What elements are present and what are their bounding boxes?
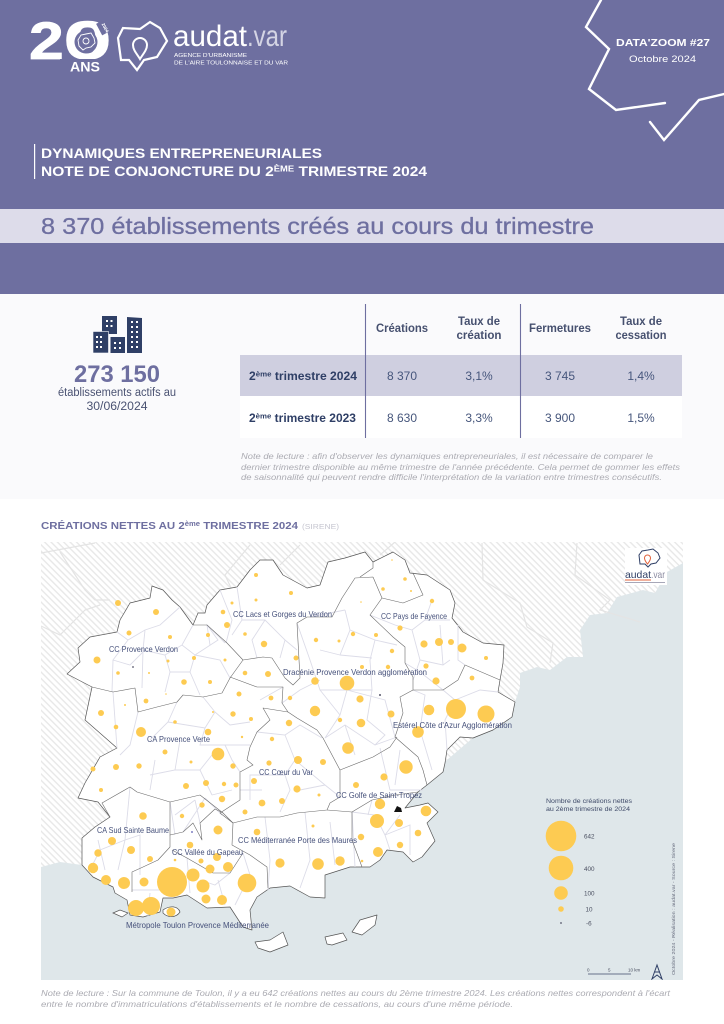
table row: 2024: 2	[249, 371, 255, 383]
table header: Créations	[376, 323, 428, 335]
decorative outline: territory shape with edition label: Octobre 2024	[629, 54, 696, 65]
map credit: Octobre 2024 - Réalisation : audat.var - Source : Sirene	[671, 843, 677, 975]
circles: net creations per commune	[88, 559, 495, 916]
reading note: map	[41, 988, 671, 1009]
scale bar: 5	[608, 968, 611, 972]
table row: 2023: 1,5%	[627, 411, 655, 425]
stat: active establishments: établissements actifs au	[58, 387, 176, 399]
legend: au 2ème trimestre de 2024	[546, 806, 631, 813]
table row: 2024: 8 370	[387, 369, 417, 383]
territory labels: CC Vallée du Gapeau	[172, 847, 243, 857]
scale bar: 0	[587, 968, 590, 972]
table row: 2024: ème	[256, 370, 272, 378]
reading note: table: de saisonnalité qui peuvent rendre difficile l'interprétation de la variation entre trimestres consécutifs.	[241, 472, 662, 482]
map logo	[625, 548, 667, 585]
panel: key figures	[0, 294, 724, 499]
map logo: .var	[651, 569, 665, 581]
table row: 2024: trimestre 2024	[272, 371, 358, 383]
headline band: 8 370 établissements créés au cours du trimestre	[41, 213, 594, 239]
territory labels	[97, 609, 512, 930]
stat: active establishments: 273 150	[74, 361, 160, 388]
table header: Taux de	[458, 316, 500, 328]
table header: Taux de	[620, 316, 662, 328]
table row: 2023: 8 630	[387, 411, 417, 425]
title: ÈME	[274, 164, 295, 174]
table row: 2023: 3 900	[545, 411, 575, 425]
Var department land	[67, 552, 515, 930]
legend: 10	[586, 906, 593, 914]
reading note: table	[241, 451, 680, 482]
table header	[376, 316, 666, 342]
neighbouring land (hatched)	[41, 542, 683, 867]
territory labels: Dracénie Provence Verdon agglomération	[283, 667, 427, 677]
territory labels: CC Cœur du Var	[259, 767, 313, 777]
map heading: (SIRENE)	[302, 522, 340, 531]
reading note: map: entre le nombre d'immatriculations d'établissements et le nombre de cessations, au cours d'une même période.	[41, 999, 513, 1009]
map	[41, 542, 683, 980]
headline band	[0, 209, 724, 243]
icon: buildings	[93, 316, 142, 353]
commune boundaries	[90, 587, 498, 916]
title: NOTE DE CONJONCTURE DU 2	[41, 163, 251, 179]
table row: 2023	[249, 411, 655, 425]
map heading: ème	[185, 521, 200, 528]
reading note: table: dernier trimestre disponible au même trimestre de l'année précédente. Cela permet de gommer les effets	[241, 462, 680, 472]
territory labels: Estérel Côte d'Azur Agglomération	[393, 720, 512, 730]
table row: 2024: 3,1%	[465, 369, 493, 383]
title	[34, 144, 427, 179]
territory labels: CC Golfe de Saint-Tropez	[336, 790, 422, 800]
logo: 20 ans: 0	[64, 11, 112, 71]
title: DYNAMIQUES ENTREPRENEURIALES	[41, 145, 322, 161]
table header: création	[456, 330, 502, 342]
table	[240, 304, 682, 438]
territory labels: CC Lacs et Gorges du Verdon	[233, 609, 332, 619]
stat: active establishments	[58, 361, 176, 413]
logo: audat.var: DE L'AIRE TOULONNAISE ET DU VAR	[174, 60, 288, 66]
logo: audat.var: .var	[247, 20, 287, 53]
legend: 100	[584, 890, 595, 898]
map heading: CRÉATIONS NETTES AU 2	[41, 520, 173, 532]
logo: audat.var	[118, 20, 288, 70]
table row: 2023: trimestre 2023	[271, 413, 356, 425]
logo: audat.var: AGENCE D'URBANISME	[174, 53, 247, 59]
EPCI boundaries	[92, 562, 500, 892]
territory labels: CC Méditerranée Porte des Maures	[238, 835, 357, 845]
reading note: table: Note de lecture : afin d'observer les dynamiques entrepreneuriales, il est nécessaire de comparer le	[241, 451, 653, 461]
table header: Fermetures	[529, 323, 591, 335]
logo: 20 ans: 2	[29, 12, 64, 71]
decorative outline: territory shape with edition label: DATA'ZOOM #27	[616, 37, 710, 49]
title: TRIMESTRE 2024	[294, 163, 427, 179]
map heading	[41, 519, 340, 532]
header panel	[0, 0, 724, 294]
stat: active establishments: 30/06/2024	[86, 401, 148, 413]
islands	[255, 915, 377, 952]
scale bar: 10 km	[628, 968, 641, 972]
reading note: map: Note de lecture : Sur la commune de Toulon, il y a eu 642 créations nettes au cours du 2ème trimestre 2024. Les créations nettes correspondent à l'écart	[41, 988, 671, 998]
table row: 2024	[249, 369, 655, 383]
territory labels: Métropole Toulon Provence Méditerranée	[126, 920, 269, 930]
legend: Nombre de créations nettes	[546, 798, 632, 805]
table header: cessation	[616, 330, 666, 342]
map logo: audat	[625, 569, 651, 581]
scale bar	[587, 968, 641, 974]
table row: 2023: 2	[249, 413, 255, 425]
legend: 642	[584, 834, 595, 840]
table row: 2024: 1,4%	[627, 369, 655, 383]
legend: 400	[584, 866, 595, 873]
table row: 2023: ème	[256, 412, 271, 420]
territory labels: CA Provence Verte	[147, 734, 210, 744]
logo: 20 ans: 2024	[101, 22, 110, 34]
legend	[546, 798, 632, 928]
decorative outline: territory shape with edition label	[586, 0, 724, 140]
legend: -6	[586, 920, 592, 928]
north arrow	[652, 965, 662, 979]
table row: 2024: 3 745	[545, 369, 575, 383]
map heading: TRIMESTRE 2024	[200, 520, 298, 532]
territory labels: CC Provence Verdon	[109, 644, 178, 654]
territory labels: CC Pays de Fayence	[381, 611, 447, 621]
table row: 2023: 3,3%	[465, 411, 493, 425]
logo: audat.var: audat	[173, 20, 248, 53]
territory labels: CA Sud Sainte Baume	[97, 825, 169, 835]
logo: 20 ans	[29, 11, 112, 74]
logo: 20 ans: ANS	[70, 60, 100, 74]
